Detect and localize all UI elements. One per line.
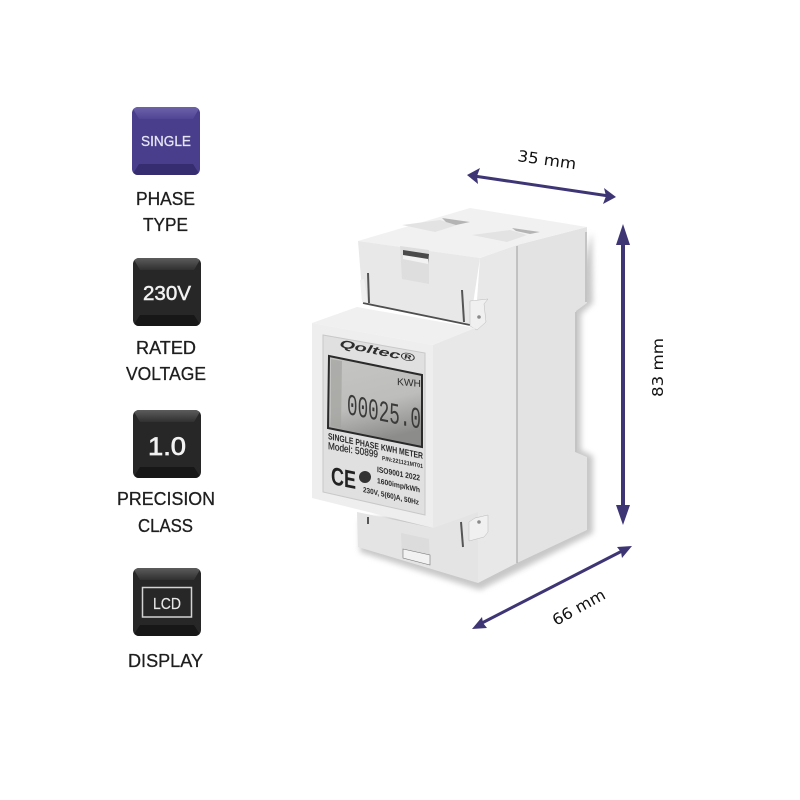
product: kWh meter [312,208,593,590]
dimension: 35 mm: 35 mm [516,147,577,173]
label: phase type [136,188,195,235]
label: phase type: TYPE [143,214,188,235]
printed specifications [328,431,424,507]
dimension: 83 mm: 83 mm [649,338,667,397]
label: display: DISPLAY [128,650,203,671]
meter label panel [323,335,425,515]
meter top face with terminal tabs [358,208,587,258]
dimension: 66 mm: 66 mm [549,586,609,629]
front cover [312,307,478,528]
printed specifications: Model: 50899 [328,441,378,461]
printed specifications: SINGLE PHASE KWH METER [328,431,423,461]
button: 230V icon [133,258,201,326]
printed specifications: P/N:221121MT01 [382,456,424,470]
label: precision class [117,488,215,536]
printed specifications: CE [331,462,356,495]
button: single phase icon [132,107,200,175]
button: LCD icon [133,568,201,636]
label: rated voltage [126,337,206,384]
printed specifications: 1600imp/kWh [377,476,420,495]
upper terminal lid [358,241,488,330]
meter reading: 00025.0 [347,390,421,439]
printed specifications: ISO9001 2022 [377,465,420,483]
button: 230V icon: 230V [143,283,192,305]
arrow: 83 mm height [616,224,630,525]
label: rated voltage: VOLTAGE [126,363,206,384]
lower terminal lid [357,512,488,583]
meter shadow [360,232,593,590]
arrow: 35 mm width [467,168,616,204]
meter right side body [433,227,587,583]
label: phase type: PHASE [136,188,195,209]
button: precision 1.0 icon: 1.0 [148,433,186,461]
button: LCD icon: LCD [153,596,181,613]
brand logo: Qoltec® [338,338,417,365]
arrow: 66 mm depth [472,546,632,629]
LCD screen [328,356,422,447]
KWH unit: KWH [397,377,421,390]
label: precision class: PRECISION [117,488,215,509]
label: precision class: CLASS [138,515,193,536]
button: precision 1.0 icon [133,410,201,478]
button: single phase icon: SINGLE [141,134,191,150]
label: rated voltage: RATED [136,337,196,358]
printed specifications: 230V, 5(60)A, 50Hz [363,485,419,507]
